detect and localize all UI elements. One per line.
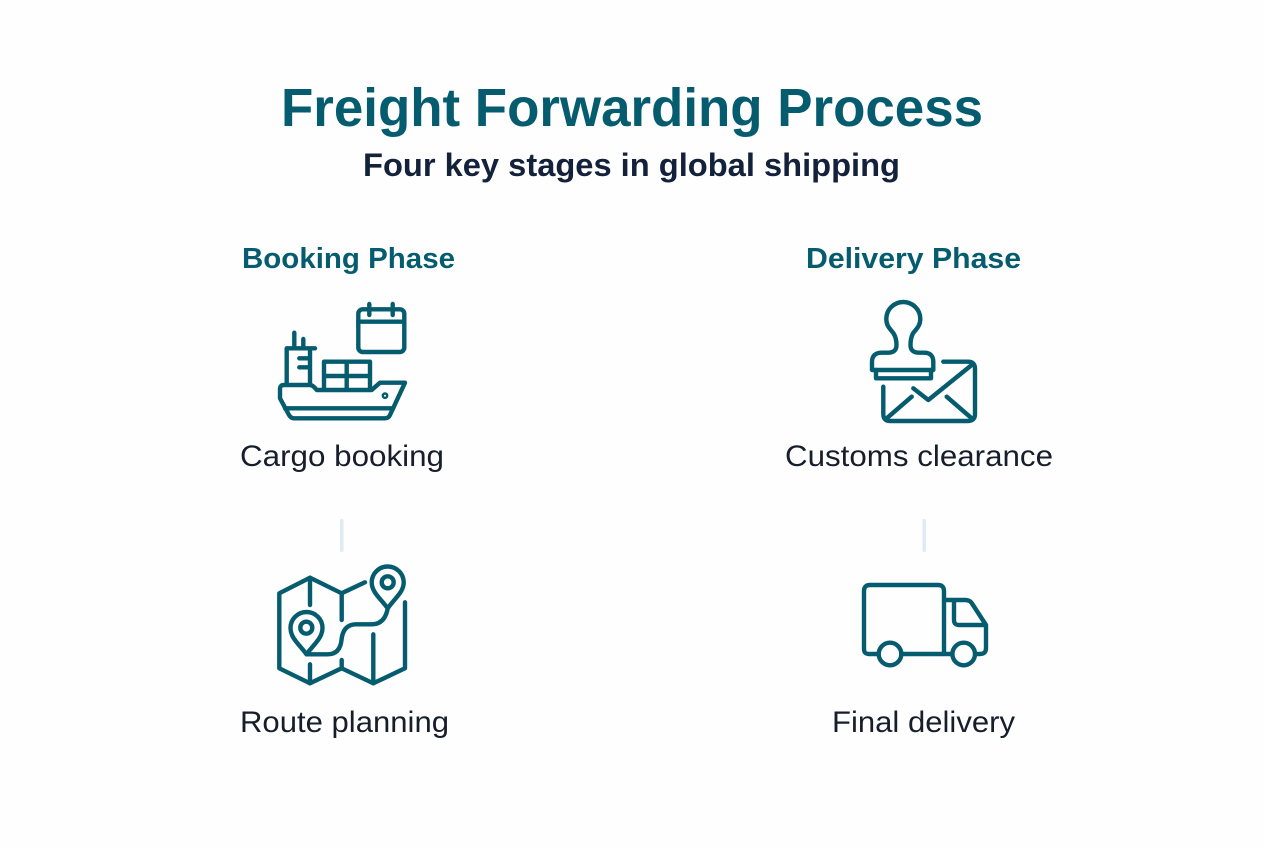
- heading: delivery phase: Delivery Phase: [806, 243, 1021, 275]
- icon: customs stamp and envelope: [872, 302, 975, 421]
- connector: booking stages: [340, 519, 344, 552]
- icon: delivery truck: [864, 585, 986, 665]
- label: final delivery: Final delivery: [832, 706, 1015, 739]
- panel: delivery phase: [785, 243, 1053, 739]
- icon: cargo ship with calendar: [280, 304, 405, 418]
- subtitle: Four key stages in global shipping: [363, 147, 900, 183]
- title: Freight Forwarding Process: [281, 78, 983, 138]
- icon: route map with pins: [279, 566, 405, 683]
- label: customs clearance: Customs clearance: [785, 440, 1053, 473]
- label: route planning: Route planning: [240, 706, 449, 739]
- label: cargo booking: Cargo booking: [240, 440, 444, 473]
- panel: booking phase: [240, 243, 455, 739]
- connector: delivery stages: [922, 519, 926, 552]
- heading: booking phase: Booking Phase: [242, 243, 455, 275]
